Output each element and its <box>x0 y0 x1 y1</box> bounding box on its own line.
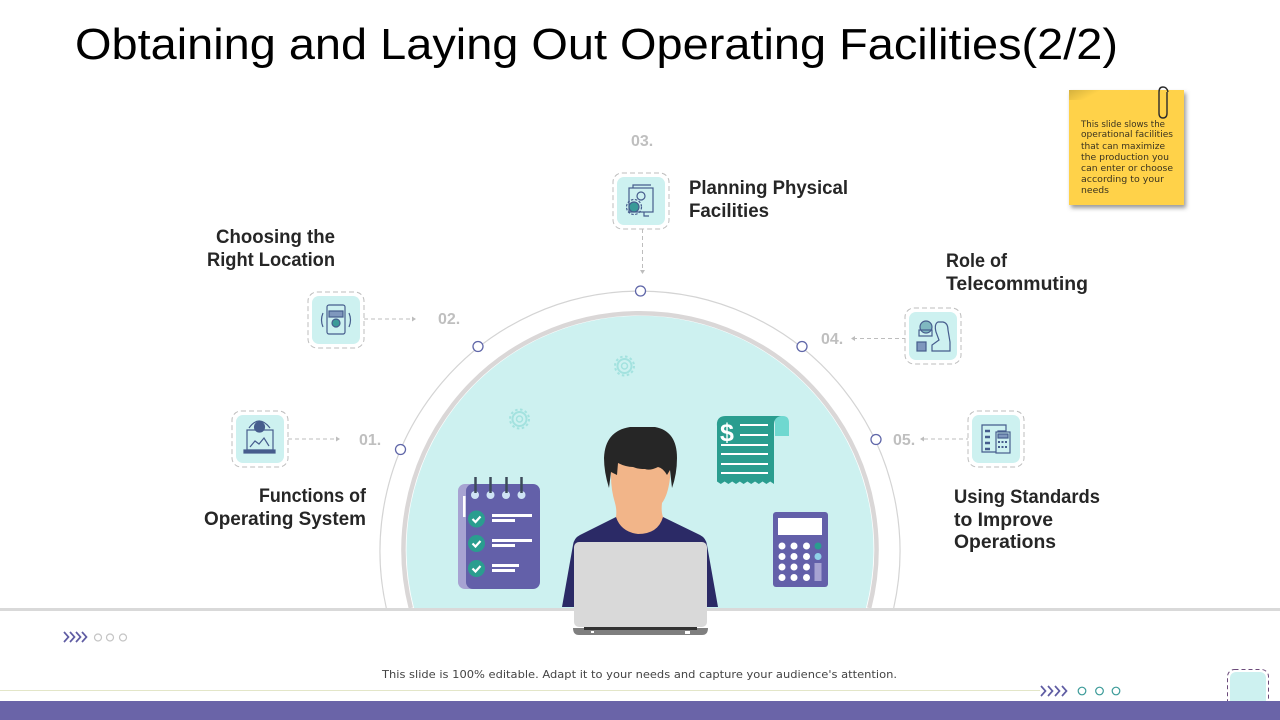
heading: Using Standards <box>954 487 1100 508</box>
item 03: planning physical facilities <box>613 133 848 274</box>
laptop <box>574 542 707 627</box>
decoration: right chevrons and circles <box>1041 686 1120 696</box>
item 02: choosing the right location <box>207 227 460 348</box>
heading <box>207 227 335 271</box>
icon: invoice receipt <box>717 416 789 484</box>
ground line <box>0 608 1280 611</box>
heading: Telecommuting <box>946 274 1088 295</box>
icon: gear left <box>510 410 529 428</box>
icon: calculator <box>773 512 828 587</box>
sticky note <box>1069 87 1184 205</box>
icon: checklist notepad <box>458 477 540 589</box>
icon: checklist and calculator <box>982 425 1010 453</box>
sticky note text: according to your <box>1081 174 1165 184</box>
icon: gear top <box>615 356 634 376</box>
page tile <box>1228 670 1268 710</box>
icon: laptop gear <box>244 421 275 453</box>
icon: paperclip <box>1159 87 1168 118</box>
face and neck <box>611 462 670 534</box>
sticky note text: This slide slows the <box>1080 119 1165 129</box>
heading: Role of <box>946 251 1008 272</box>
decoration: left chevrons and circles <box>64 632 126 642</box>
heading <box>204 486 367 530</box>
heading: Planning Physical <box>689 178 848 199</box>
title: Obtaining and Laying Out Operating Facilities(2/2) <box>75 20 1118 69</box>
number 03: 03. <box>631 133 653 150</box>
heading: Right Location <box>207 250 335 271</box>
heading: to Improve <box>954 510 1053 531</box>
sticky note text <box>1080 119 1173 195</box>
sticky note text: that can maximize <box>1081 141 1165 151</box>
torso <box>562 517 718 607</box>
footer line <box>0 690 1040 691</box>
heading: Facilities <box>689 201 769 222</box>
sticky note text: needs <box>1081 185 1109 195</box>
connector arrow <box>288 438 338 440</box>
connector arrow <box>364 318 412 320</box>
connector arrow <box>924 438 968 440</box>
icon: telecommuting person <box>917 321 950 351</box>
item 05: using standards to improve operations <box>893 411 1100 553</box>
number 04: 04. <box>821 331 843 348</box>
hair <box>604 427 677 488</box>
number 02: 02. <box>438 311 460 328</box>
heading: Choosing the <box>216 227 335 248</box>
icon: monitor and gear <box>626 185 653 216</box>
heading <box>954 487 1100 553</box>
heading: Operating System <box>204 509 366 530</box>
item 01: functions of operating system <box>204 411 381 530</box>
connector arrow <box>642 229 644 272</box>
bottom bar <box>0 701 1280 720</box>
heading: Functions of <box>259 486 367 507</box>
number 05: 05. <box>893 432 915 449</box>
icon: invoice receipt: $ <box>720 419 734 447</box>
heading <box>946 251 1088 295</box>
person at laptop <box>562 427 718 635</box>
timeline nodes <box>396 286 881 454</box>
sticky note text: operational facilities <box>1081 129 1173 139</box>
footer text: This slide is 100% editable. Adapt it to your needs and capture your audience's attention. <box>381 668 897 681</box>
heading <box>689 178 848 222</box>
sticky note text: can enter or choose <box>1081 163 1173 173</box>
number 01: 01. <box>359 432 381 449</box>
item 04: role of telecommuting <box>821 251 1088 364</box>
connector arrow <box>853 338 905 340</box>
dome diagram <box>380 291 900 608</box>
icon: phone location <box>322 305 350 334</box>
sticky note text: the production you <box>1081 152 1169 162</box>
heading: Operations <box>954 532 1056 553</box>
